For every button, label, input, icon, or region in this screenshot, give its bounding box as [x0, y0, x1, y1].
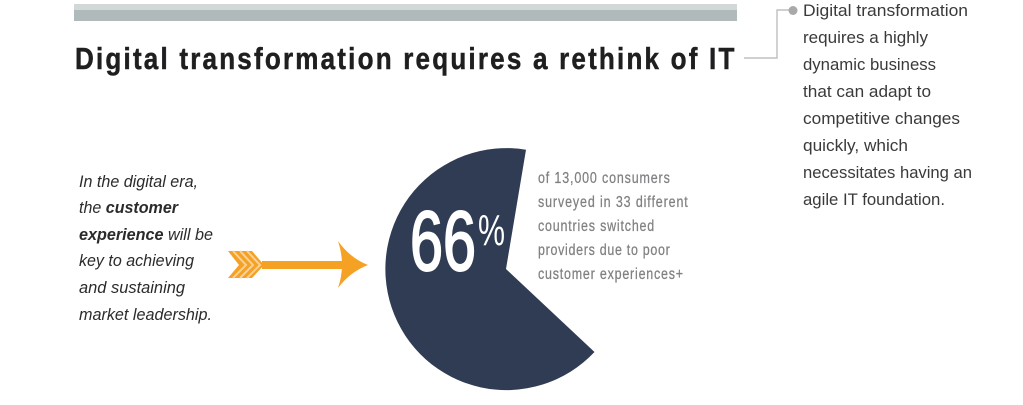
left statement text: experience will be	[79, 225, 213, 244]
statistic description	[538, 170, 688, 283]
statistic description: surveyed in 33 different	[538, 194, 688, 211]
callout text: that can adapt to	[803, 82, 931, 101]
callout text	[803, 1, 972, 209]
callout text: dynamic business	[803, 55, 936, 74]
statistic description: customer experiences+	[538, 266, 683, 283]
statistic description: providers due to poor	[538, 242, 670, 259]
left statement text: the customer	[79, 198, 179, 217]
header bar	[74, 4, 737, 21]
left statement text: In the digital era,	[79, 172, 198, 191]
pie chart: 66%	[385, 148, 594, 390]
pie label: 66%: 66	[410, 194, 476, 288]
statistic description: countries switched	[538, 218, 654, 235]
icon: orange arrow	[228, 241, 368, 288]
callout text: Digital transformation	[803, 1, 968, 20]
callout connector	[744, 6, 798, 58]
left statement text: and sustaining	[79, 278, 186, 297]
statistic description: of 13,000 consumers	[538, 170, 670, 187]
left statement text: key to achieving	[79, 251, 195, 270]
callout text: agile IT foundation.	[803, 190, 945, 209]
pie label: 66%: %	[478, 206, 505, 255]
title: Digital transformation requires a rethink of IT	[75, 42, 735, 77]
left statement text	[79, 172, 213, 324]
callout text: requires a highly	[803, 28, 928, 47]
left statement text: market leadership.	[79, 305, 212, 324]
callout text: necessitates having an	[803, 163, 972, 182]
callout text: competitive changes	[803, 109, 960, 128]
callout text: quickly, which	[803, 136, 908, 155]
